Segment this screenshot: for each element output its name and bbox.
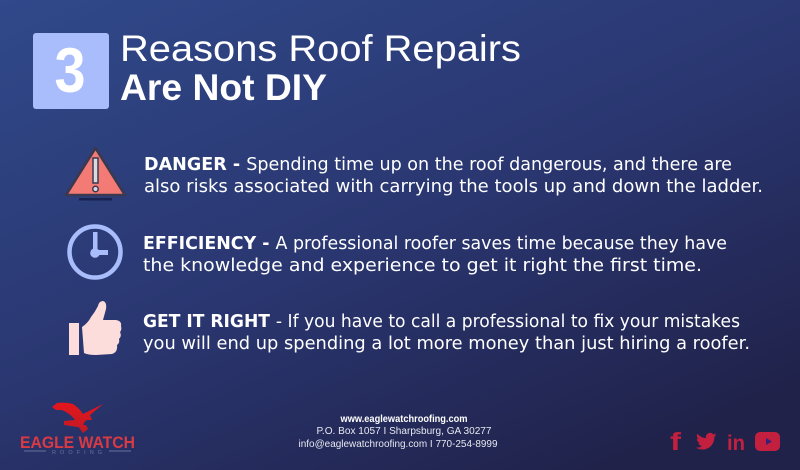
- wordmark: EAGLE WATCH: [20, 433, 135, 452]
- social icons: [670, 428, 780, 456]
- logo: eagle watch roofing: [20, 403, 135, 456]
- text: get it right: you will end up spending a lot more money than just hiring a roofer.: [143, 333, 750, 354]
- title: Are Not DIY: [120, 67, 327, 108]
- number badge: [33, 33, 109, 109]
- icon: clock: [70, 226, 120, 278]
- title: [120, 28, 521, 108]
- icon: thumbs up: [69, 301, 121, 355]
- contact block: info@eaglewatchroofing.com I 770-254-8999: [298, 439, 498, 450]
- icon: facebook: f: [670, 428, 682, 456]
- number badge: 3: [54, 36, 86, 106]
- icon: warning triangle: [66, 148, 125, 200]
- icon: twitter: [696, 433, 716, 449]
- icon: eagle: [52, 403, 103, 433]
- text: efficiency: EFFICIENCY - A professional roofer saves time because they have: [143, 233, 727, 254]
- title: Reasons Roof Repairs: [120, 28, 521, 69]
- text: get it right: GET IT RIGHT - If you have to call a professional to fix your mistakes: [143, 311, 740, 332]
- contact block: [298, 414, 498, 450]
- icon: youtube: [755, 432, 780, 451]
- contact block: www.eaglewatchroofing.com: [340, 414, 468, 425]
- text: get it right: [143, 311, 750, 354]
- text: danger: also risks associated with carrying the tools up and down the ladder.: [144, 176, 763, 197]
- sub wordmark: ROOFING: [52, 450, 102, 456]
- contact block: P.O. Box 1057 I Sharpsburg, GA 30277: [316, 426, 492, 437]
- text: efficiency: [143, 233, 727, 276]
- icon: linkedin: in: [727, 432, 745, 455]
- text: efficiency: the knowledge and experience to get it right the first time.: [143, 255, 702, 276]
- text: danger: DANGER - Spending time up on the roof dangerous, and there are: [144, 154, 732, 175]
- text: danger: [144, 154, 763, 197]
